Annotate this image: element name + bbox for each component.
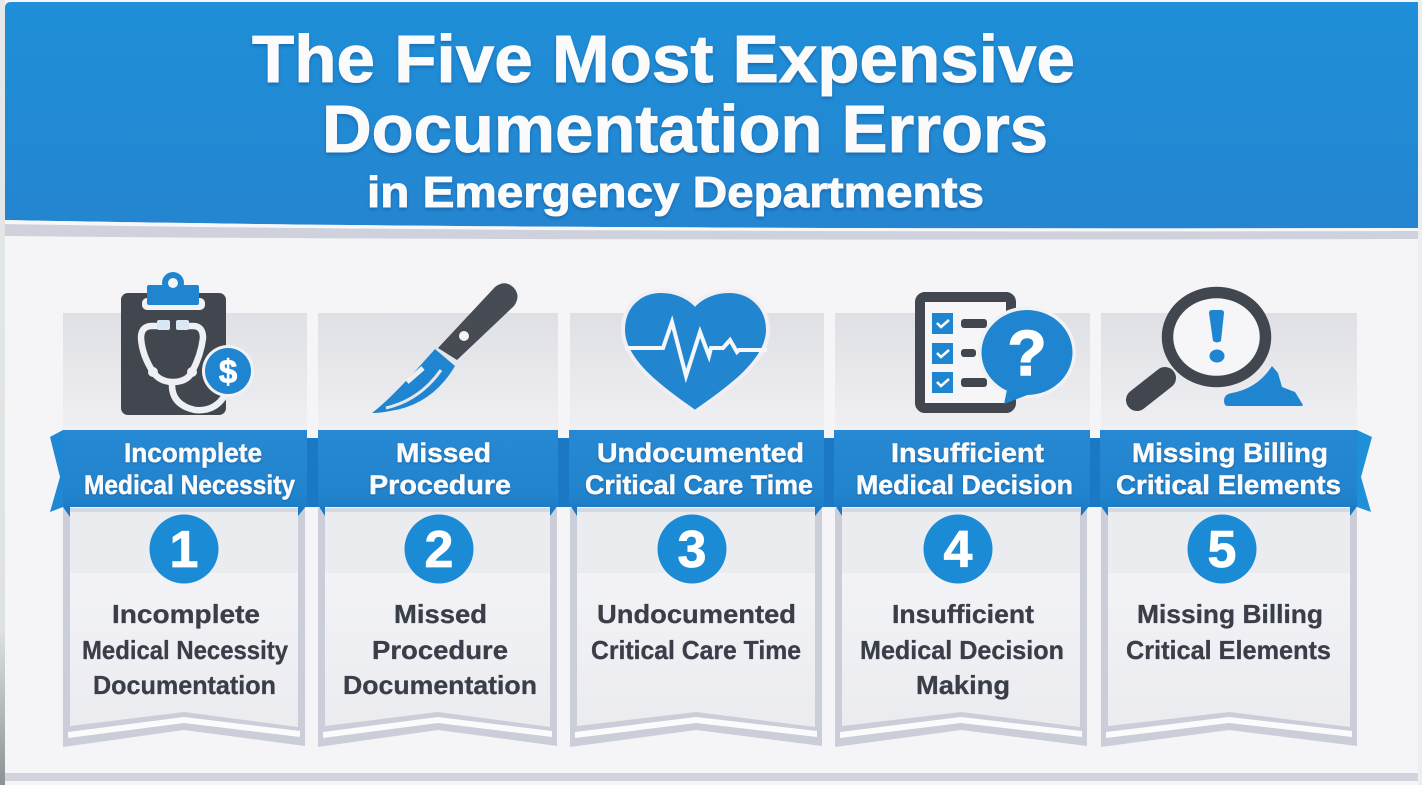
icon: heart with ECG line bbox=[623, 291, 768, 412]
ribbon label 2 bbox=[369, 438, 511, 500]
title bbox=[252, 22, 1075, 217]
icon: clipboard with stethoscope and dollar bbox=[121, 272, 254, 415]
title: The Five Most Expensive bbox=[252, 22, 1075, 97]
icon: magnifier with exclamation and blue mound bbox=[1137, 292, 1303, 406]
right edge strip bbox=[1418, 0, 1422, 785]
card 2 bbox=[318, 508, 557, 747]
icon: scalpel bbox=[372, 283, 518, 413]
ribbon label 3 bbox=[585, 438, 813, 500]
ribbon label 3: Critical Care Time bbox=[585, 470, 813, 500]
card 4: Medical Decision bbox=[860, 635, 1064, 665]
number badge 4: 4 bbox=[944, 521, 973, 579]
ribbon label 5: Critical Elements bbox=[1116, 470, 1341, 500]
footer band bbox=[5, 773, 1418, 781]
number badge 1: 1 bbox=[170, 521, 198, 579]
ribbon label 5: Missing Billing bbox=[1132, 438, 1328, 468]
card 1 bbox=[63, 508, 305, 747]
card 2: Documentation bbox=[343, 670, 537, 700]
card 2: Procedure bbox=[372, 635, 508, 665]
ribbon bbox=[50, 430, 1372, 517]
number badge 5 bbox=[1188, 514, 1256, 584]
card 3 bbox=[570, 508, 822, 747]
number badge 5: 5 bbox=[1208, 521, 1236, 579]
ribbon label 4 bbox=[856, 438, 1073, 500]
ribbon label 1: Incomplete bbox=[124, 438, 262, 468]
number badge 1 bbox=[150, 514, 218, 584]
ribbon label 2: Procedure bbox=[369, 470, 511, 500]
card 4: Insufficient bbox=[892, 599, 1034, 629]
icon: checklist with question bubble bbox=[920, 297, 1076, 408]
card 1: Medical Necessity bbox=[82, 635, 288, 665]
card 5: Critical Elements bbox=[1126, 635, 1331, 665]
ribbon label 4: Medical Decision bbox=[856, 470, 1073, 500]
number badge 3: 3 bbox=[678, 521, 706, 579]
ribbon label 2: Missed bbox=[396, 438, 491, 468]
card 5 bbox=[1101, 508, 1357, 747]
card 5: Missing Billing bbox=[1137, 599, 1323, 629]
title: in Emergency Departments bbox=[367, 168, 984, 217]
ribbon label 4: Insufficient bbox=[891, 438, 1044, 468]
card 1: Documentation bbox=[93, 670, 276, 700]
number badge 2: 2 bbox=[425, 521, 453, 579]
card 3: Undocumented bbox=[597, 599, 796, 629]
ribbon label 5 bbox=[1116, 438, 1341, 500]
number badge 2 bbox=[404, 514, 474, 584]
ribbon label 1 bbox=[84, 438, 295, 500]
header banner bbox=[5, 2, 1418, 228]
title: Documentation Errors bbox=[322, 92, 1048, 167]
number badge 3 bbox=[658, 514, 726, 584]
header shadow band bbox=[5, 224, 1418, 240]
icon: clipboard with stethoscope and dollar: $ bbox=[219, 353, 237, 390]
card 4: Making bbox=[916, 670, 1010, 700]
ribbon label 3: Undocumented bbox=[597, 438, 804, 468]
top panels bbox=[63, 313, 1357, 431]
number badge 4 bbox=[924, 514, 992, 584]
card 2: Missed bbox=[394, 599, 487, 629]
header highlight bbox=[5, 220, 1418, 231]
left edge strip bbox=[0, 0, 5, 785]
icon: checklist with question bubble: ? bbox=[1007, 317, 1047, 389]
card 3: Critical Care Time bbox=[591, 635, 801, 665]
card 1: Incomplete bbox=[112, 599, 260, 629]
card 4 bbox=[835, 508, 1087, 747]
ribbon label 1: Medical Necessity bbox=[84, 470, 295, 500]
